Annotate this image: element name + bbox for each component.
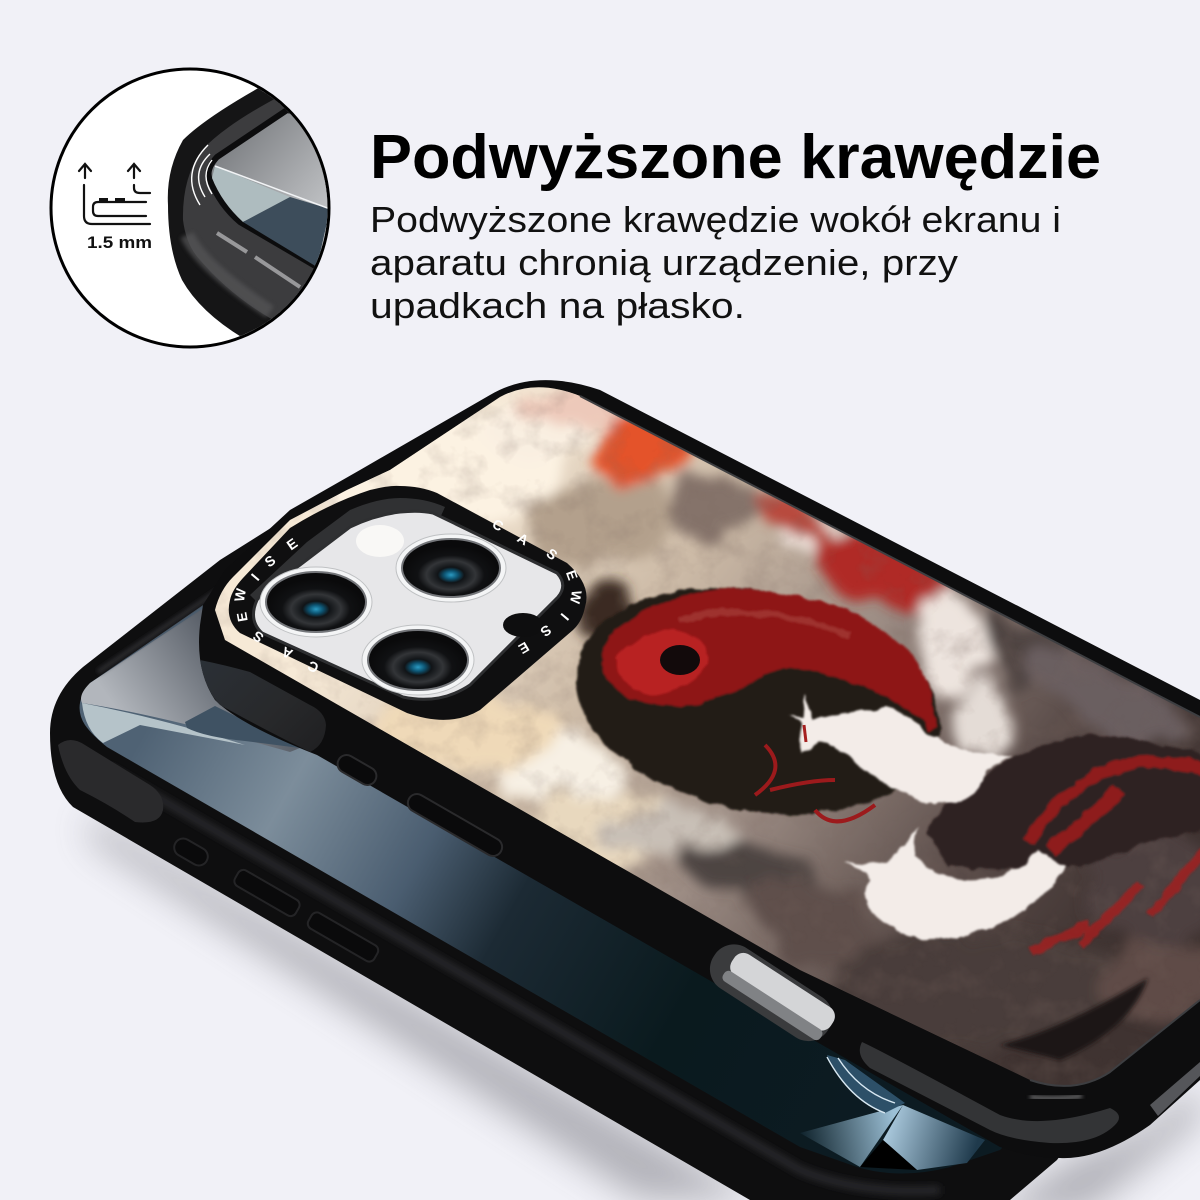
dark tail swirl: [927, 735, 1200, 952]
camera side grip: [200, 660, 326, 752]
painted back artwork: [200, 370, 1200, 1100]
yin-yang disc: [574, 586, 943, 818]
watercolor mottling: [216, 390, 1162, 1078]
yin-yang eye: [660, 645, 700, 675]
upper phone case: [199, 370, 1200, 1158]
title: Podwyższone krawędzie: [370, 123, 1101, 192]
brand lettering on bump: S: [250, 628, 266, 646]
brand lettering on bump: C: [305, 658, 321, 676]
description text: Podwyższone krawędzie wokół ekranu i: [370, 199, 1061, 240]
screen light wedge: [82, 703, 245, 745]
screen light upper area: [81, 607, 320, 752]
lower frame corner grip: [58, 740, 163, 822]
description text: [370, 199, 1061, 326]
brand lettering on bump: W: [567, 589, 585, 606]
icon label: 1.5 mm: [87, 234, 152, 252]
brand lettering on bump: E: [516, 639, 532, 657]
side key small: [334, 752, 380, 788]
fox tail: [846, 825, 1066, 939]
brand lettering on bump: C: [490, 516, 506, 534]
brand lettering on bump: E: [233, 611, 251, 623]
lidar sensor: [503, 613, 543, 637]
drop shadow: [90, 815, 1200, 1200]
inset circle: raised edge detail: [51, 69, 345, 347]
lens 1: [260, 567, 372, 637]
fox body: [790, 694, 1013, 804]
brand lettering on bump: I: [558, 610, 572, 624]
side key long: [405, 791, 505, 859]
brand lettering on bump: W: [231, 586, 249, 603]
case rim highlight: [580, 396, 1200, 1086]
brand lettering on bump: S: [538, 622, 554, 640]
camera glass plate: [253, 511, 563, 699]
lower phone screen: [80, 490, 1050, 1174]
inset case corner photo: [168, 88, 328, 336]
screen dark patch: [185, 706, 300, 748]
right corner opening: [1150, 1062, 1200, 1116]
description text: aparatu chronią urządzenie, przy: [370, 242, 958, 283]
corner rim highlight: [1030, 1096, 1082, 1098]
brand lettering on bump: E: [284, 535, 300, 553]
white fox: [790, 694, 1066, 939]
lens 3: [362, 625, 474, 695]
brand lettering on bump: [231, 516, 585, 676]
brand lettering on bump: S: [262, 552, 278, 570]
lower phone with clear case: [50, 462, 1100, 1200]
flash: [356, 525, 404, 557]
fox face mark: [804, 725, 806, 742]
camera bump: [229, 486, 587, 720]
lens 2: [396, 534, 506, 602]
inset impact arcs: [192, 145, 212, 205]
dark brush stroke: [1000, 978, 1148, 1060]
brand lettering on bump: I: [248, 570, 262, 584]
brand lettering on bump: E: [563, 568, 581, 582]
description text: upadkach na płasko.: [370, 285, 745, 326]
lower frame highlight: [107, 768, 940, 1191]
lower case frame: [50, 462, 1100, 1200]
brand lettering on bump: S: [543, 545, 561, 563]
charging port cut-out: [701, 936, 841, 1050]
corner grip side: [860, 1042, 1119, 1143]
camera inner rim: [250, 498, 445, 602]
brand lettering on bump: A: [279, 644, 295, 662]
inset screen: [209, 110, 340, 267]
upper case body: [199, 380, 1200, 1158]
screen blue highlights: [800, 1055, 985, 1170]
red ribbons: [755, 745, 875, 821]
brand lettering on bump: A: [515, 530, 531, 548]
icon: raised edge diagram: [79, 164, 150, 224]
side buttons: [171, 835, 380, 964]
lower frame upper highlight: [98, 542, 290, 672]
